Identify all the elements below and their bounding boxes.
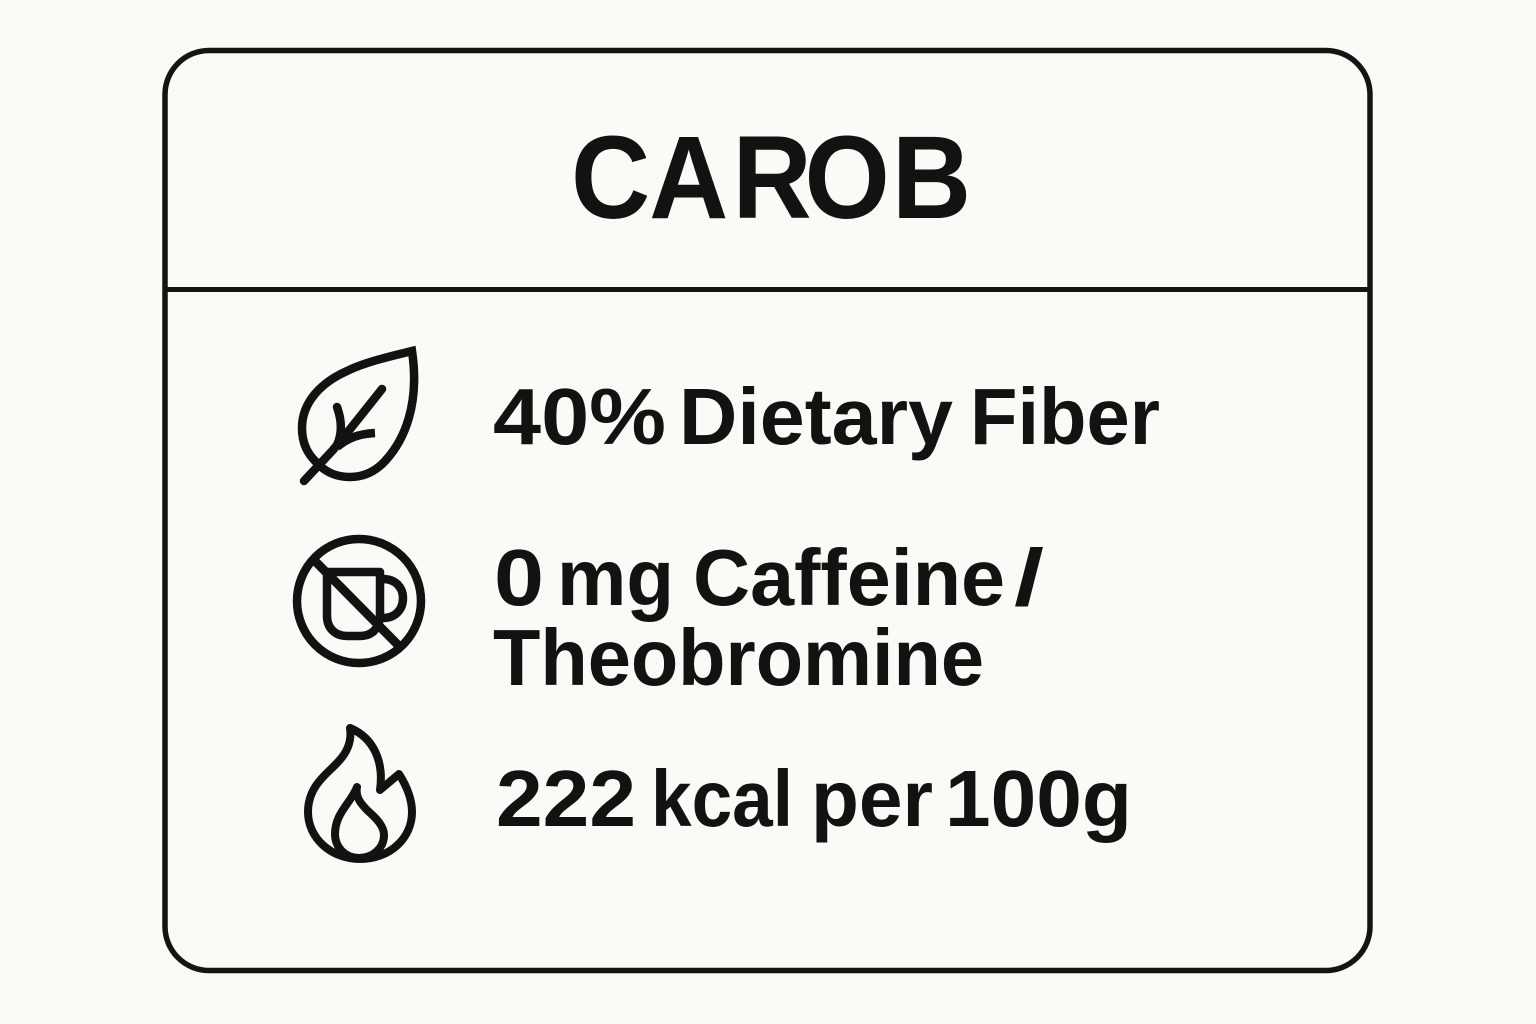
text: dietary fiber: Dietary xyxy=(679,372,954,461)
title: CAROB xyxy=(571,112,971,244)
text: dietary fiber xyxy=(493,372,1160,461)
text: calories xyxy=(496,754,1132,843)
text: caffeine and theobromine: 0 xyxy=(494,533,544,622)
text: caffeine and theobromine: mg xyxy=(557,533,674,622)
icon: leaf xyxy=(302,351,414,481)
text: calories: 222 xyxy=(496,754,636,843)
text: caffeine and theobromine: Theobromine xyxy=(493,613,984,702)
icon: flame xyxy=(308,728,412,859)
text: caffeine and theobromine: Caffeine xyxy=(693,533,1005,622)
text: calories: 100g xyxy=(945,754,1132,843)
text: dietary fiber: 40% xyxy=(493,372,666,461)
text: calories: kcal xyxy=(651,754,793,843)
panel: carob card xyxy=(165,50,1370,970)
text: dietary fiber: Fiber xyxy=(970,372,1160,461)
icon: no caffeine xyxy=(297,539,421,663)
text: caffeine and theobromine xyxy=(493,533,1044,702)
text: calories: per xyxy=(811,754,933,843)
text: caffeine and theobromine: / xyxy=(1014,533,1044,622)
